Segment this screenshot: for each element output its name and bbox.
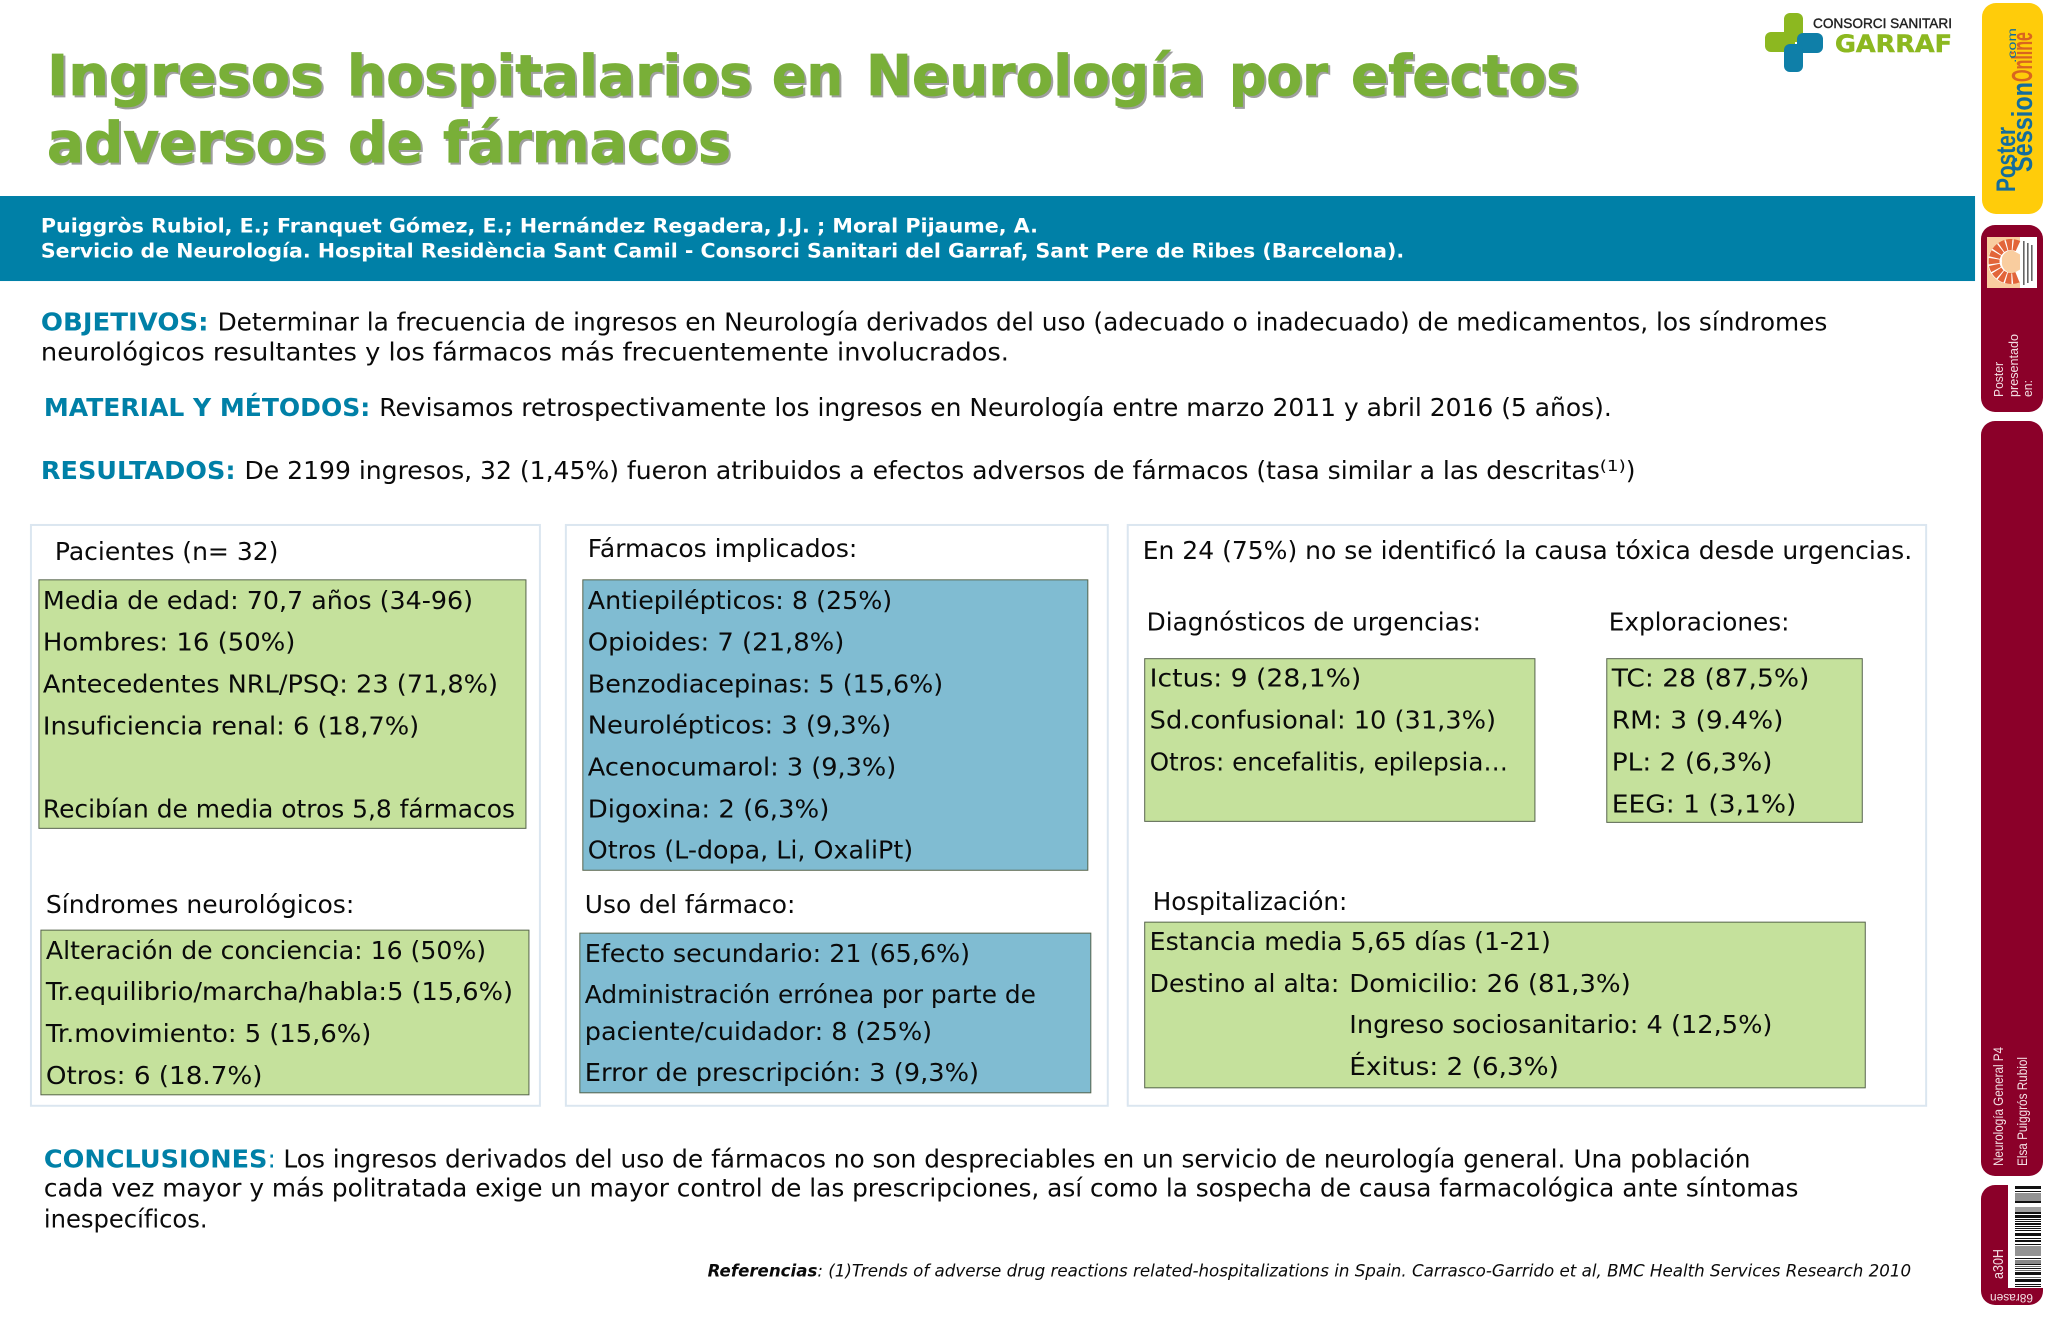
sidebar: poster session online badge: .com (2005, 28, 2019, 63)
label: poster presentado en: presentado (2006, 334, 2021, 397)
box: uso del fármaco: paciente/cuidador: 8 (25%) (585, 1017, 932, 1046)
title: Ingresos (47, 44, 324, 109)
title: adversos (49, 113, 328, 178)
referencias: : (1)Trends of adverse drug reactions related-hospitalizations in Spain. Carrasco-Garrido et al, BMC Health Services Research 2010 (817, 1260, 1911, 1280)
box: exploraciones (1607, 659, 1862, 822)
conclusiones text: inespecíficos. (44, 1205, 208, 1234)
sidebar: poster session online badge: Poster (1991, 127, 2021, 192)
box: hospitalización: Ingreso sociosanitario: 4 (12,5%) (1349, 1010, 1772, 1039)
heading: exploraciones: Exploraciones: (1609, 608, 1789, 637)
referencias: Referencias (708, 1260, 817, 1280)
box: hospitalización (1145, 922, 1865, 1088)
box: datos de pacientes: Recibían de media otros 5,8 fármacos (43, 794, 515, 823)
box: fármacos implicados: Otros (L-dopa, Li, OxaliPt) (588, 835, 913, 864)
title: por (1229, 44, 1328, 109)
heading: uso del fármaco: Uso del fármaco: (585, 890, 795, 919)
box: exploraciones: RM: 3 (9.4%) (1612, 706, 1783, 735)
box: datos de pacientes: Hombres: 16 (50%) (43, 628, 295, 657)
authors band: Servicio de Neurología. Hospital Residència Sant Camil - Consorci Sanitari del Garraf, Sant Pere de Ribes (Barcelona). (41, 238, 1404, 262)
authors band (0, 196, 1975, 281)
label: session and author: Elsa Puiggrós Rubiol (2014, 1057, 2030, 1166)
box: uso del fármaco: Error de prescripción: 3 (9,3%) (585, 1058, 979, 1087)
sidebar: session tab (1981, 421, 2043, 1176)
material y métodos text: MATERIAL Y MÉTODOS: (44, 393, 370, 422)
label: session and author: Neurología General P4 (1990, 1047, 2006, 1166)
heading: síndromes neurológicos: Síndromes neurológicos: (46, 890, 354, 919)
title: Ingresos (49, 46, 326, 111)
box: hospitalización: Éxitus: 2 (6,3%) (1349, 1052, 1559, 1081)
box: diagnósticos de urgencias: Otros: encefalitis, epilepsia… (1150, 747, 1508, 776)
box: síndromes neurológicos: Otros: 6 (18.7%) (46, 1061, 262, 1090)
box: hospitalización: Destino al alta: (1150, 969, 1339, 998)
box: fármacos implicados: Neurolépticos: 3 (9,3%) (588, 711, 891, 740)
box: exploraciones: EEG: 1 (3,1%) (1612, 789, 1796, 818)
title: efectos (1353, 46, 1581, 111)
title: de (348, 111, 423, 176)
barcode (2015, 1186, 2041, 1287)
label: session and author (1990, 1047, 2030, 1166)
label: poster presentado en: Poster (1991, 361, 2006, 397)
objetivos text: neurológicos resultantes y los fármacos más frecuentemente involucrados. (41, 337, 1009, 366)
box: uso del fármaco: Administración errónea por parte de (585, 980, 1036, 1009)
label: barcode code: a30H (1990, 1249, 2007, 1279)
box: síndromes neurológicos: Tr.equilibrio/marcha/habla:5 (15,6%) (45, 977, 513, 1006)
box: fármacos implicados: Antiepilépticos: 8 (25%) (588, 586, 892, 615)
heading: causa tóxica: En 24 (75%) no se identificó la causa tóxica desde urgencias. (1143, 536, 1912, 565)
box: exploraciones: PL: 2 (6,3%) (1612, 747, 1772, 776)
title: efectos (1351, 44, 1579, 109)
title: en (772, 44, 843, 109)
box: síndromes neurológicos: Tr.movimiento: 5 (15,6%) (45, 1019, 371, 1048)
box: fármacos implicados: Digoxina: 2 (6,3%) (588, 794, 829, 823)
icon: brain (1987, 237, 2037, 288)
title: adversos (47, 111, 326, 176)
heading: pacientes: Pacientes (n= 32) (55, 537, 278, 566)
objetivos text: OBJETIVOS: (41, 307, 209, 336)
sidebar: poster session online badge (1982, 3, 2043, 214)
box: síndromes neurológicos: Alteración de conciencia: 16 (50%) (46, 936, 486, 965)
box: uso del fármaco (580, 933, 1091, 1093)
panel: fármacos (566, 525, 1108, 1106)
sidebar: congress tab with brain logo (1981, 225, 2043, 412)
material y métodos text: Revisamos retrospectivamente los ingresos en Neurología entre marzo 2011 y abril 2016 (5 años). (379, 393, 1612, 422)
label: poster presentado en: en: (2020, 380, 2035, 397)
logo: Consorci Sanitari Garraf (1765, 13, 1952, 72)
box: diagnósticos de urgencias: Sd.confusional: 10 (31,3%) (1150, 706, 1496, 735)
box: diagnósticos de urgencias (1145, 659, 1535, 821)
panel: pacientes y síndromes (31, 525, 540, 1106)
heading: hospitalización: Hospitalización: (1153, 887, 1347, 916)
sidebar: barcode tab (1981, 1185, 2043, 1305)
poster content (0, 196, 1975, 1280)
panel: diagnóstico y hospitalización (1128, 525, 1926, 1106)
box: fármacos implicados: Opioides: 7 (21,8%) (588, 628, 844, 657)
title: hospitalarios (347, 44, 752, 109)
heading: diagnósticos de urgencias: Diagnósticos de urgencias: (1147, 608, 1481, 637)
box: fármacos implicados: Benzodiacepinas: 5 (15,6%) (588, 670, 943, 699)
box: datos de pacientes: Media de edad: 70,7 años (34-96) (43, 586, 473, 615)
conclusiones text: Los ingresos derivados del uso de fármacos no son despreciables en un servicio de neurología general. Una población (283, 1145, 1750, 1174)
title: por (1231, 46, 1330, 111)
box: datos de pacientes: Antecedentes NRL/PSQ: 23 (71,8%) (43, 670, 498, 699)
label: poster presentado en (1991, 334, 2035, 397)
logo: Consorci Sanitari Garraf: GARRAF (1835, 30, 1952, 58)
conclusiones text: CONCLUSIONES (44, 1145, 267, 1174)
sidebar: poster session online badge: Session (2007, 82, 2039, 172)
title (47, 44, 1581, 178)
title: hospitalarios (349, 46, 754, 111)
conclusiones text: cada vez mayor y más politratada exige un mayor control de las prescripciones, así como la sospecha de causa farmacológica ante síntomas (44, 1174, 1798, 1203)
title: en (774, 46, 845, 111)
conclusiones text (44, 1145, 1798, 1234)
box: hospitalización: Domicilio: 26 (81,3%) (1349, 969, 1631, 998)
box: diagnósticos de urgencias: Ictus: 9 (28,1%) (1150, 664, 1361, 693)
title: Neurología (866, 44, 1205, 109)
icon: cross (1765, 13, 1823, 72)
title: Neurología (868, 46, 1207, 111)
resultados text: RESULTADOS: (41, 456, 236, 485)
box: datos de pacientes: Insuficiencia renal: 6 (18,7%) (43, 712, 419, 741)
authors band: Puiggròs Rubiol, E.; Franquet Gómez, E.; Hernández Regadera, J.J. ; Moral Pijaume, A. (41, 214, 1038, 238)
box: fármacos implicados (583, 580, 1088, 870)
box: uso del fármaco: Efecto secundario: 21 (65,6%) (585, 939, 970, 968)
title: de (350, 113, 425, 178)
box: síndromes neurológicos (41, 930, 529, 1095)
box: fármacos implicados: Acenocumarol: 3 (9,3%) (588, 752, 896, 781)
objetivos text (41, 307, 1827, 366)
resultados text: ) (1626, 456, 1635, 485)
objetivos text: Determinar la frecuencia de ingresos en Neurología derivados del uso (adecuado o inadecuado) de medicamentos, los síndromes (218, 307, 1827, 336)
logo: Consorci Sanitari Garraf: CONSORCI SANITARI (1813, 15, 1952, 31)
conclusiones text: : (267, 1145, 276, 1174)
box: exploraciones: TC: 28 (87,5%) (1611, 664, 1809, 693)
label: barcode caption: 68rasen (1990, 1291, 2033, 1305)
box: hospitalización: Estancia media 5,65 días (1-21) (1150, 927, 1551, 956)
title: fármacos (445, 113, 733, 178)
resultados text: (1) (1600, 457, 1626, 475)
heading: fármacos implicados: Fármacos implicados: (588, 534, 857, 563)
box: datos de pacientes (39, 580, 526, 828)
resultados text: De 2199 ingresos, 32 (1,45%) fueron atribuidos a efectos adversos de fármacos (tasa similar a las descritas (245, 456, 1600, 485)
title: fármacos (443, 111, 731, 176)
